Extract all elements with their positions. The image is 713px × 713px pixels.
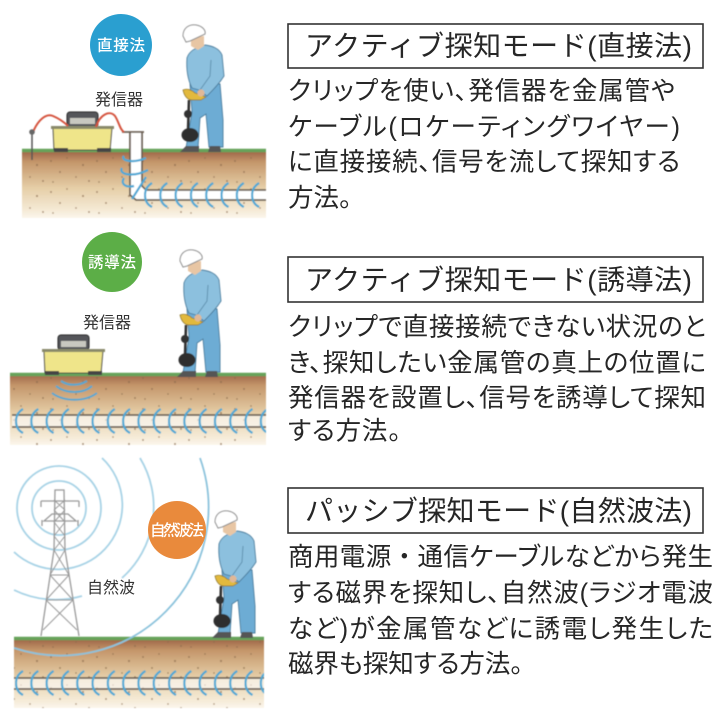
description: き、探知したい金属管の真上の位置に <box>288 350 706 378</box>
natural wave rings <box>14 458 209 656</box>
worker with detector <box>212 511 256 638</box>
description: 方法。 <box>288 184 352 212</box>
worker with detector <box>177 250 221 377</box>
signal coils on pipe <box>121 156 266 210</box>
section: active direct mode <box>288 24 703 212</box>
section: active induction mode <box>288 257 706 446</box>
buried pipe and coils <box>12 405 266 437</box>
badge: direct method: 直接法 <box>97 36 145 54</box>
ground: soil and grass <box>14 638 264 708</box>
transmission tower <box>41 490 79 636</box>
badge: natural wave method: 自然波法 <box>150 522 204 540</box>
heading box <box>288 257 703 302</box>
description: クリップを使い、発信器を金属管や <box>288 78 675 106</box>
label: transmitter: 発信器 <box>95 91 143 109</box>
induction waves <box>52 381 97 400</box>
description: 商用電源・通信ケーブルなどから発生 <box>288 544 713 572</box>
transmitter <box>51 112 114 152</box>
description: する磁界を探知し、自然波(ラジオ電波 <box>288 580 713 608</box>
badge: natural wave method <box>148 501 206 559</box>
heading box <box>288 24 703 68</box>
ground: soil and grass <box>10 374 266 445</box>
description: など)が金属管などに誘電し発生した <box>288 616 713 644</box>
description <box>288 544 713 678</box>
buried pipe and coils <box>14 668 264 698</box>
section: passive mode <box>288 488 713 678</box>
description: 発信器を設置し、信号を誘導して探知 <box>288 384 706 412</box>
panel: induction method illustration <box>10 250 266 445</box>
panel: passive method illustration <box>14 458 264 708</box>
badge: induction method: 誘導法 <box>88 254 136 272</box>
heading box <box>288 488 703 533</box>
badge: direct method <box>90 14 152 76</box>
buried pipe <box>122 132 266 200</box>
heading: アクティブ探知モード(直接法) <box>305 30 692 62</box>
description: 磁界も探知する方法。 <box>288 650 523 678</box>
transmitter <box>42 335 105 375</box>
description <box>288 314 706 446</box>
worker with detector <box>180 25 224 152</box>
description: クリップで直接接続できない状況のと <box>288 314 706 342</box>
ground stake <box>29 129 35 160</box>
badge: induction method <box>82 232 142 292</box>
ground: soil and grass <box>22 150 266 218</box>
label: natural wave: 自然波 <box>87 579 135 597</box>
description: する方法。 <box>288 418 401 446</box>
red clip wires <box>33 113 124 132</box>
description: ケーブル(ロケーティングワイヤー) <box>288 114 680 142</box>
heading: アクティブ探知モード(誘導法) <box>305 264 692 296</box>
description <box>288 78 680 212</box>
heading: パッシブ探知モード(自然波法) <box>305 496 692 526</box>
label: transmitter: 発信器 <box>83 314 131 332</box>
panel: direct method illustration <box>22 25 266 218</box>
description: に直接接続、信号を流して探知する <box>288 148 680 176</box>
